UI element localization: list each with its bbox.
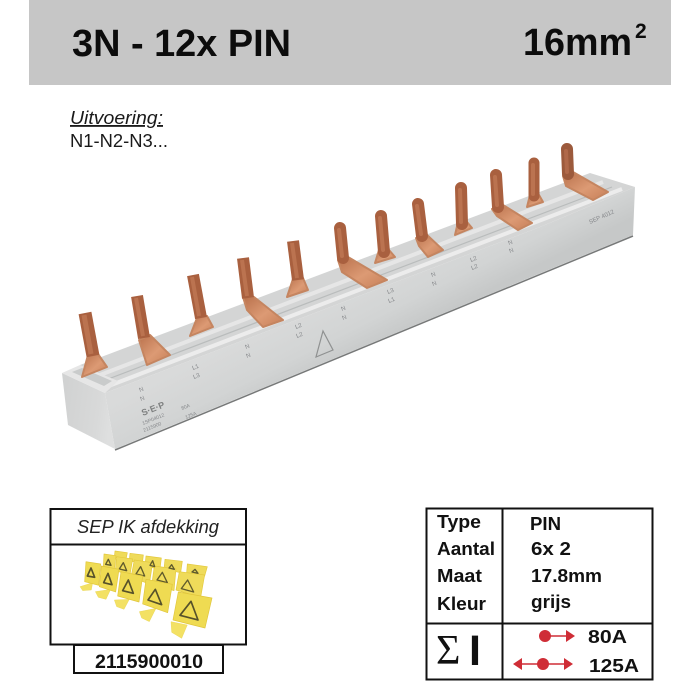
sigma current symbol: I [469,627,481,675]
pin 5 [287,241,308,297]
printed markings: 80A [181,403,192,412]
text block: uitvoering: N1-N2-N3... [70,130,168,151]
printed markings: SEP 4012 [588,209,616,226]
spec values [530,514,602,612]
current ratings: 80A [588,627,627,647]
spec labels [437,512,495,614]
printed markings: 1SP04012 [142,412,166,427]
spec values: 6x 2 [531,539,571,559]
pin 7 [375,216,395,263]
printed markings: N [431,272,437,279]
printed markings: N [140,396,146,403]
pin 8 [416,204,443,257]
cross-section label: 2 [635,20,647,43]
cross-section label: 16mm [523,22,632,64]
printed markings: N [432,281,438,288]
printed markings: L2 [471,264,480,272]
current ratings [588,627,639,676]
article number box [74,645,223,673]
printed markings: N [245,344,251,351]
spec labels: Aantal [437,539,495,559]
printed markings [139,209,616,434]
product photo: busbar [62,149,635,450]
spec labels: Type [437,512,481,532]
bar top surface [80,173,635,393]
article number box: 2115900010 [95,652,203,673]
sigma current symbol [436,627,481,675]
spec values: 17.8mm [531,566,602,586]
pin 1 [82,313,107,377]
printed markings: N [139,387,145,394]
pin 6 [338,228,387,288]
printed markings: L1 [192,364,201,372]
title: 3N - 12x PIN [72,23,291,65]
pin 12 [563,149,608,200]
printed markings: N [508,240,514,247]
printed markings: L2 [295,323,304,331]
copper pins [82,149,608,377]
pin 2 [136,296,170,365]
printed markings: N [341,306,347,313]
printed markings: N [342,315,348,322]
printed markings: L3 [193,373,202,381]
printed markings: N [246,353,252,360]
text block: uitvoering [70,107,168,151]
sigma current symbol: Σ [436,628,460,674]
icon: one-way arrow 80A [539,630,575,642]
header band [29,0,671,85]
bar end cap [62,365,118,449]
bar front face [105,187,635,449]
icon: yellow covers [80,551,212,638]
pin 4 [242,258,283,327]
printed markings: L1 [388,297,397,305]
printed markings: L2 [470,256,479,264]
printed markings: 125A [185,411,198,421]
current ratings: 125A [589,656,639,676]
text block: uitvoering: Uitvoering: [70,107,163,128]
spec labels: Kleur [437,594,486,614]
printed markings: S·E·P [140,400,166,418]
printed markings: 2115900 [143,421,163,434]
pin 9 [455,188,472,235]
spec values: PIN [530,514,561,534]
pin 3 [190,275,213,336]
pin 11 [527,163,543,207]
panel: SEP IK afdekking [50,509,246,644]
panel: specification table [426,508,653,680]
warning triangle mark [316,331,333,357]
spec values: grijs [531,592,571,612]
panel heading: SEP IK afdekking [77,517,219,537]
printed markings: L2 [296,332,305,340]
icon: two-way arrow 125A [513,658,573,670]
printed markings: N [509,248,515,255]
printed markings: L3 [387,288,396,296]
spec labels: Maat [437,566,482,586]
pin 10 [492,175,532,230]
